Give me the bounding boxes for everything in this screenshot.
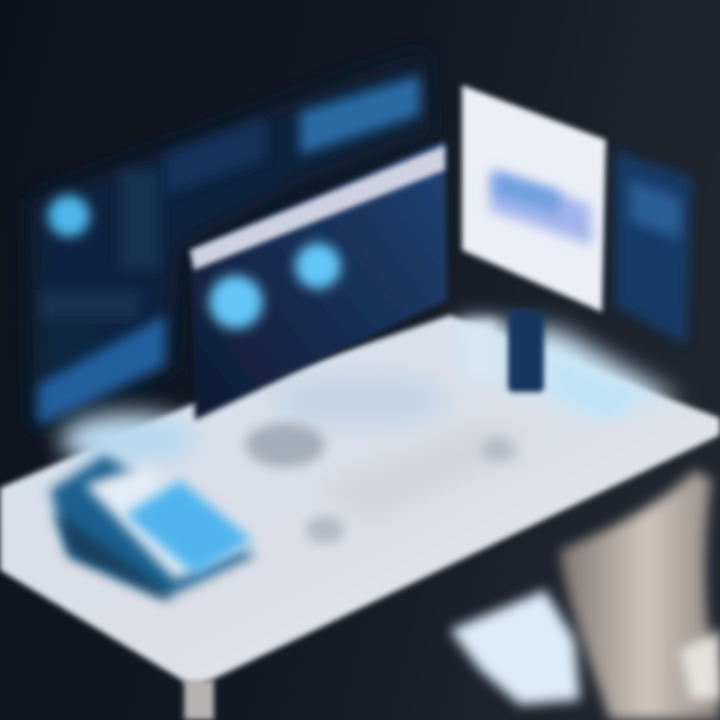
keyboard area <box>310 420 540 525</box>
icon: small glowing circle <box>295 243 341 289</box>
icon: small desk object <box>481 438 515 462</box>
icon: blue cup / phone stand <box>462 310 640 420</box>
panel: far right blue screen <box>615 150 692 345</box>
chair / pedestal at right <box>450 470 720 720</box>
monitor title bar <box>190 145 445 270</box>
desk leg near <box>184 680 214 720</box>
desk top and front edge <box>0 315 720 688</box>
soft blue reflection on the desk <box>460 320 680 420</box>
chart block: top right of back screen <box>300 75 420 155</box>
icon: mouse <box>305 516 345 544</box>
desk <box>0 315 720 720</box>
panel: central monitor <box>190 140 447 420</box>
monitor stand <box>245 423 325 467</box>
panel: right white screen <box>462 85 606 312</box>
device: tablet on desk <box>50 455 255 600</box>
icon: large glowing circle <box>209 275 263 329</box>
lower chart block <box>38 315 165 425</box>
panel: floating back-left screen <box>30 50 430 430</box>
chart band on white screen <box>490 170 592 245</box>
icon: glowing circle <box>48 195 90 237</box>
